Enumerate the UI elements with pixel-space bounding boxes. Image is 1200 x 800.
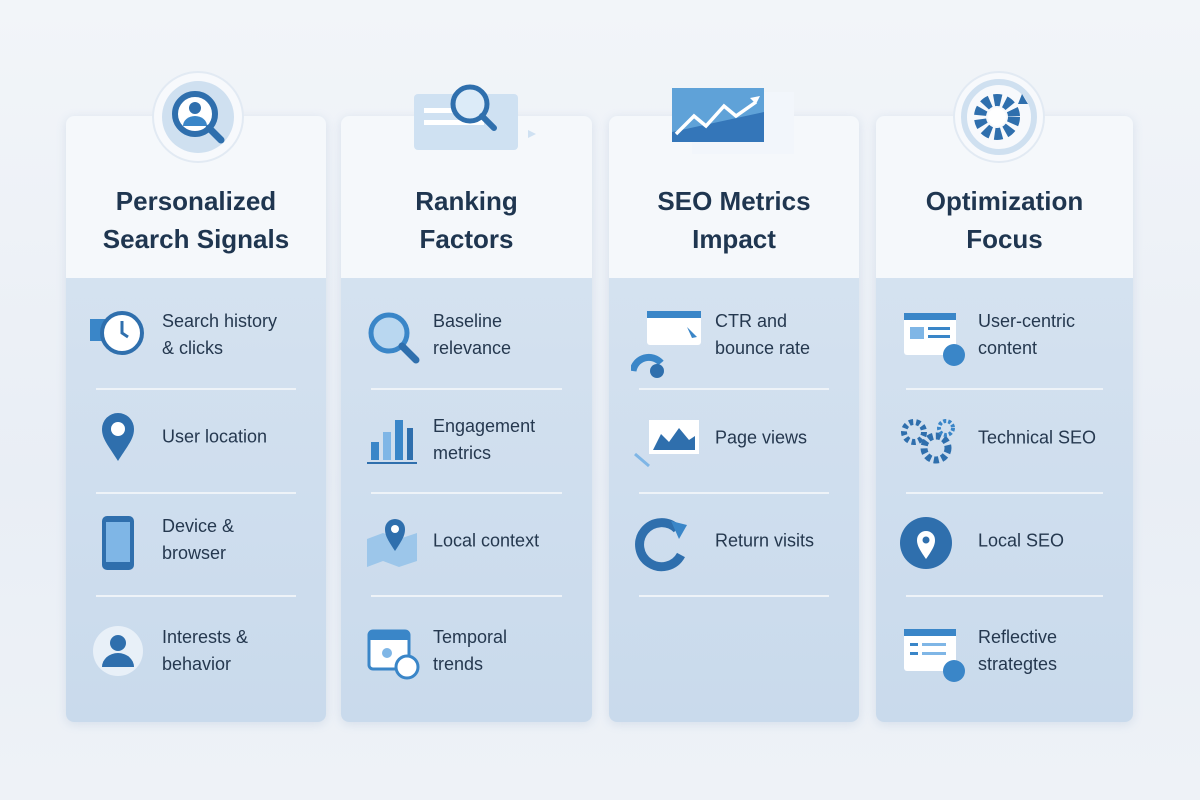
item: reflective strategies: strategtes: [978, 654, 1057, 674]
item: temporal: [368, 627, 507, 680]
item: temporal: trends: [433, 654, 483, 674]
item: search history: & clicks: [162, 338, 223, 358]
item: engagement: metrics: [433, 443, 491, 463]
item: baseline relevance: Baseline: [433, 311, 502, 331]
panel: ranking factors: [341, 116, 592, 722]
item: technical seo: Technical SEO: [978, 428, 1096, 448]
item: device: Device &: [162, 516, 234, 536]
item: search history: Search history: [162, 311, 277, 331]
icon: search card: [414, 84, 536, 150]
item: device: [102, 516, 234, 570]
item: temporal: Temporal: [433, 627, 507, 647]
item: reflective strategies: Reflective: [978, 627, 1057, 647]
item: local seo: Local SEO: [978, 530, 1064, 550]
icon: search person: [152, 71, 244, 163]
panel: optimization focus: [876, 116, 1133, 722]
item: baseline relevance: [368, 311, 511, 364]
item: ctr: bounce rate: [715, 338, 810, 358]
item: user location: User location: [162, 426, 267, 446]
icon: gear: [953, 71, 1045, 163]
panel: seo metrics impact: [609, 116, 859, 722]
heading: Focus: [966, 224, 1043, 254]
heading: Ranking: [415, 186, 518, 216]
item: ctr: [631, 311, 810, 378]
item: reflective strategies: [904, 627, 1057, 682]
heading: [103, 186, 289, 254]
heading: [926, 186, 1083, 254]
item: return visits: [635, 518, 814, 572]
item: technical seo: [901, 419, 1096, 464]
heading: Impact: [692, 224, 776, 254]
item: local context: [367, 519, 539, 567]
heading: Personalized: [116, 186, 276, 216]
item: interests: [93, 626, 248, 676]
item: local context: Local context: [433, 530, 539, 550]
heading: SEO Metrics: [657, 186, 811, 216]
panel: personalized search signals: [66, 116, 326, 722]
item: user location: [102, 413, 267, 461]
item: local seo: [900, 517, 1064, 569]
heading: Optimization: [926, 186, 1083, 216]
item: interests: Interests &: [162, 627, 248, 647]
icon: growth chart: [672, 88, 794, 142]
heading: [657, 186, 811, 254]
heading: Factors: [420, 224, 513, 254]
item: user-centric content: [904, 311, 1075, 366]
heading: Search Signals: [103, 224, 289, 254]
item: engagement: Engagement: [433, 416, 535, 436]
item: interests: behavior: [162, 654, 231, 674]
item: user-centric content: User-centric: [978, 311, 1075, 331]
item: page views: Page views: [715, 428, 807, 448]
item: baseline relevance: relevance: [433, 338, 511, 358]
item: search history: [90, 311, 277, 358]
item: user-centric content: content: [978, 338, 1037, 358]
item: device: browser: [162, 543, 226, 563]
item: page views: [634, 420, 807, 467]
item: return visits: Return visits: [715, 530, 814, 550]
item: engagement: [367, 416, 535, 464]
heading: [415, 186, 518, 254]
item: ctr: CTR and: [715, 311, 787, 331]
